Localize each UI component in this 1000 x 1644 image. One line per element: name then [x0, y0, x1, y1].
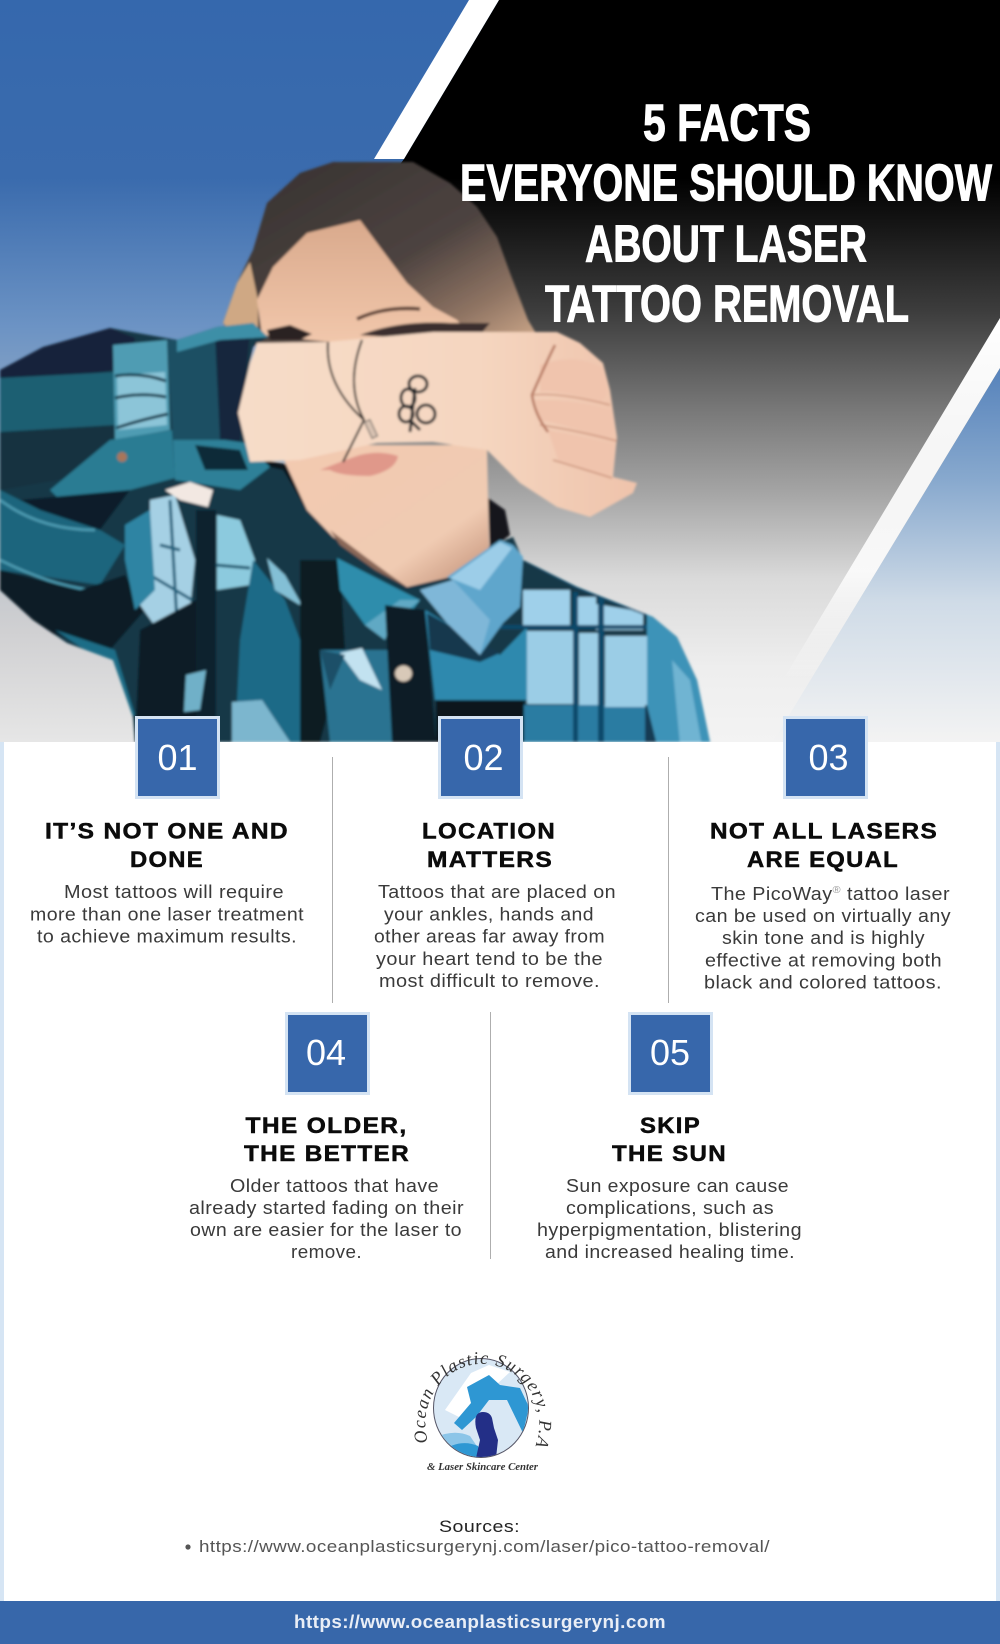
fact 03	[695, 716, 951, 992]
shirt button	[395, 666, 412, 682]
logo: Ocean Plastic Surgery: & Laser Skincare Center	[427, 1462, 538, 1473]
pocket area	[320, 650, 392, 742]
body text 04: own are easier for the laser to	[190, 1220, 462, 1240]
body text 05: and increased healing time.	[545, 1242, 795, 1262]
body text 03: tattoo laser	[841, 884, 950, 904]
footer bar	[0, 1601, 1000, 1644]
right collar	[420, 540, 523, 655]
chest light patch	[140, 495, 195, 640]
body text 03	[695, 884, 951, 992]
right sleeve	[647, 612, 712, 745]
hair tan sliver	[223, 262, 258, 335]
title	[460, 94, 993, 334]
right blue panel	[740, 340, 1000, 745]
lower right band	[522, 703, 647, 742]
finger creases	[532, 394, 617, 478]
body text 04: already started fading on their	[189, 1198, 464, 1218]
body text 01: more than one laser treatment	[30, 904, 304, 924]
body text 01: Most tattoos will require	[64, 882, 284, 902]
heading 02: LOCATION	[422, 818, 556, 844]
body text 04: Older tattoos that have	[230, 1176, 439, 1196]
sleeve lower button strip	[50, 430, 175, 500]
footer bar: https://www.oceanplasticsurgerynj.com	[294, 1612, 666, 1632]
heading 01: DONE	[130, 847, 204, 872]
number badge 03: 03	[808, 737, 849, 778]
body text 02: your heart tend to be the	[376, 949, 603, 969]
chest dark	[300, 560, 345, 742]
tattoo	[399, 376, 435, 432]
number badge 05: 05	[650, 1032, 690, 1073]
body text 05	[537, 1176, 802, 1262]
eye	[267, 325, 312, 340]
left white stripe	[374, 0, 499, 159]
logo: Ocean Plastic Surgery: Ocean Plastic Surgery, P.A.	[414, 1352, 552, 1446]
body text 03: effective at removing both	[705, 950, 942, 970]
neck and chin	[283, 445, 489, 587]
lower light patches	[232, 700, 290, 742]
logo: Ocean Plastic Surgery	[414, 1352, 552, 1473]
dark hair behind neck	[488, 498, 510, 550]
number badge 04	[285, 1012, 370, 1095]
forearm and fist	[238, 332, 637, 517]
heading 04: THE BETTER	[244, 1141, 410, 1166]
heading 04	[244, 1113, 410, 1166]
body text 02: your ankles, hands and	[384, 904, 594, 924]
glasses	[360, 322, 490, 340]
heading 05: THE SUN	[612, 1141, 727, 1166]
dark hair at shoulder	[230, 455, 345, 680]
body text 04: remove.	[291, 1242, 362, 1262]
heading 03	[710, 818, 938, 872]
heading 03: NOT ALL LASERS	[710, 818, 938, 844]
body text 01: to achieve maximum results.	[37, 926, 297, 946]
heading 05	[612, 1113, 727, 1166]
eyebrow	[357, 308, 420, 319]
right white stripe	[744, 318, 1000, 745]
body text 02: other areas far away from	[374, 926, 605, 946]
body text 03: can be used on virtually any	[695, 906, 951, 926]
fact 05	[537, 1012, 802, 1262]
neck shadow left	[330, 530, 407, 587]
sleeve dark middle	[0, 424, 116, 442]
body text 03: black and colored tattoos.	[704, 972, 942, 992]
body text 01	[30, 882, 304, 946]
number badge 04: 04	[306, 1032, 346, 1073]
body text 02: most difficult to remove.	[379, 971, 600, 991]
body text 04	[189, 1176, 464, 1262]
fact 02	[374, 716, 616, 991]
heading 01	[45, 818, 289, 872]
shirt	[0, 320, 720, 750]
title: ABOUT LASER	[585, 216, 867, 274]
plaid lines	[573, 592, 578, 742]
title: 5 FACTS	[643, 94, 811, 152]
number badge 02	[438, 716, 523, 799]
sleeve button	[117, 452, 127, 462]
body text 03: The PicoWay	[711, 884, 822, 904]
hero background	[0, 0, 1000, 745]
body text 05: Sun exposure can cause	[566, 1176, 789, 1196]
finger shading	[535, 359, 615, 476]
fact 01	[30, 716, 304, 946]
heading 02: MATTERS	[427, 847, 553, 872]
body text 03: skin tone and is highly	[722, 928, 925, 948]
hair	[223, 162, 537, 345]
forehead	[257, 220, 470, 345]
body text 05: hyperpigmentation, blistering	[537, 1220, 802, 1240]
heading 02	[422, 818, 556, 872]
body text 05: complications, such as	[566, 1198, 774, 1218]
light squares	[523, 590, 570, 628]
heading 01: IT’S NOT ONE AND	[45, 818, 289, 844]
number badge 03	[783, 716, 868, 799]
number badge 02: 02	[463, 737, 504, 778]
number badge 01: 01	[157, 737, 198, 778]
heading 03: ARE EQUAL	[747, 847, 899, 872]
bracelet charm	[364, 420, 378, 438]
white content panel	[0, 742, 1000, 1602]
sleeve wrinkles	[20, 490, 130, 530]
sleeve band light	[113, 340, 170, 440]
fact 04	[189, 1012, 464, 1262]
sources heading: Sources:	[439, 1517, 520, 1536]
sleeve teal upper	[0, 372, 115, 440]
heading 04: THE OLDER,	[246, 1113, 408, 1138]
white skin gap under sleeve	[165, 482, 213, 507]
body text 02: Tattoos that are placed on	[378, 882, 616, 902]
body text 02	[374, 882, 616, 991]
sleeve navy top	[0, 328, 135, 378]
heading 05: SKIP	[640, 1113, 701, 1138]
black gradient panel	[300, 0, 1000, 745]
number badge 05	[628, 1012, 713, 1095]
chest teal	[235, 560, 300, 742]
photo: woman covering face with tattooed wrist	[0, 162, 720, 750]
black horizontal block	[436, 700, 524, 745]
bracelet	[328, 340, 364, 462]
body text 03: ®	[833, 885, 841, 896]
sources link: https://www.oceanplasticsurgerynj.com/laser/pico-tattoo-removal/	[199, 1537, 770, 1556]
cuff	[168, 338, 221, 440]
chest second light patch	[217, 515, 255, 590]
left collar	[337, 558, 420, 627]
number badge 01	[135, 716, 220, 799]
sleeve underside dark	[0, 570, 145, 650]
placket	[385, 605, 436, 742]
lips	[320, 453, 398, 476]
